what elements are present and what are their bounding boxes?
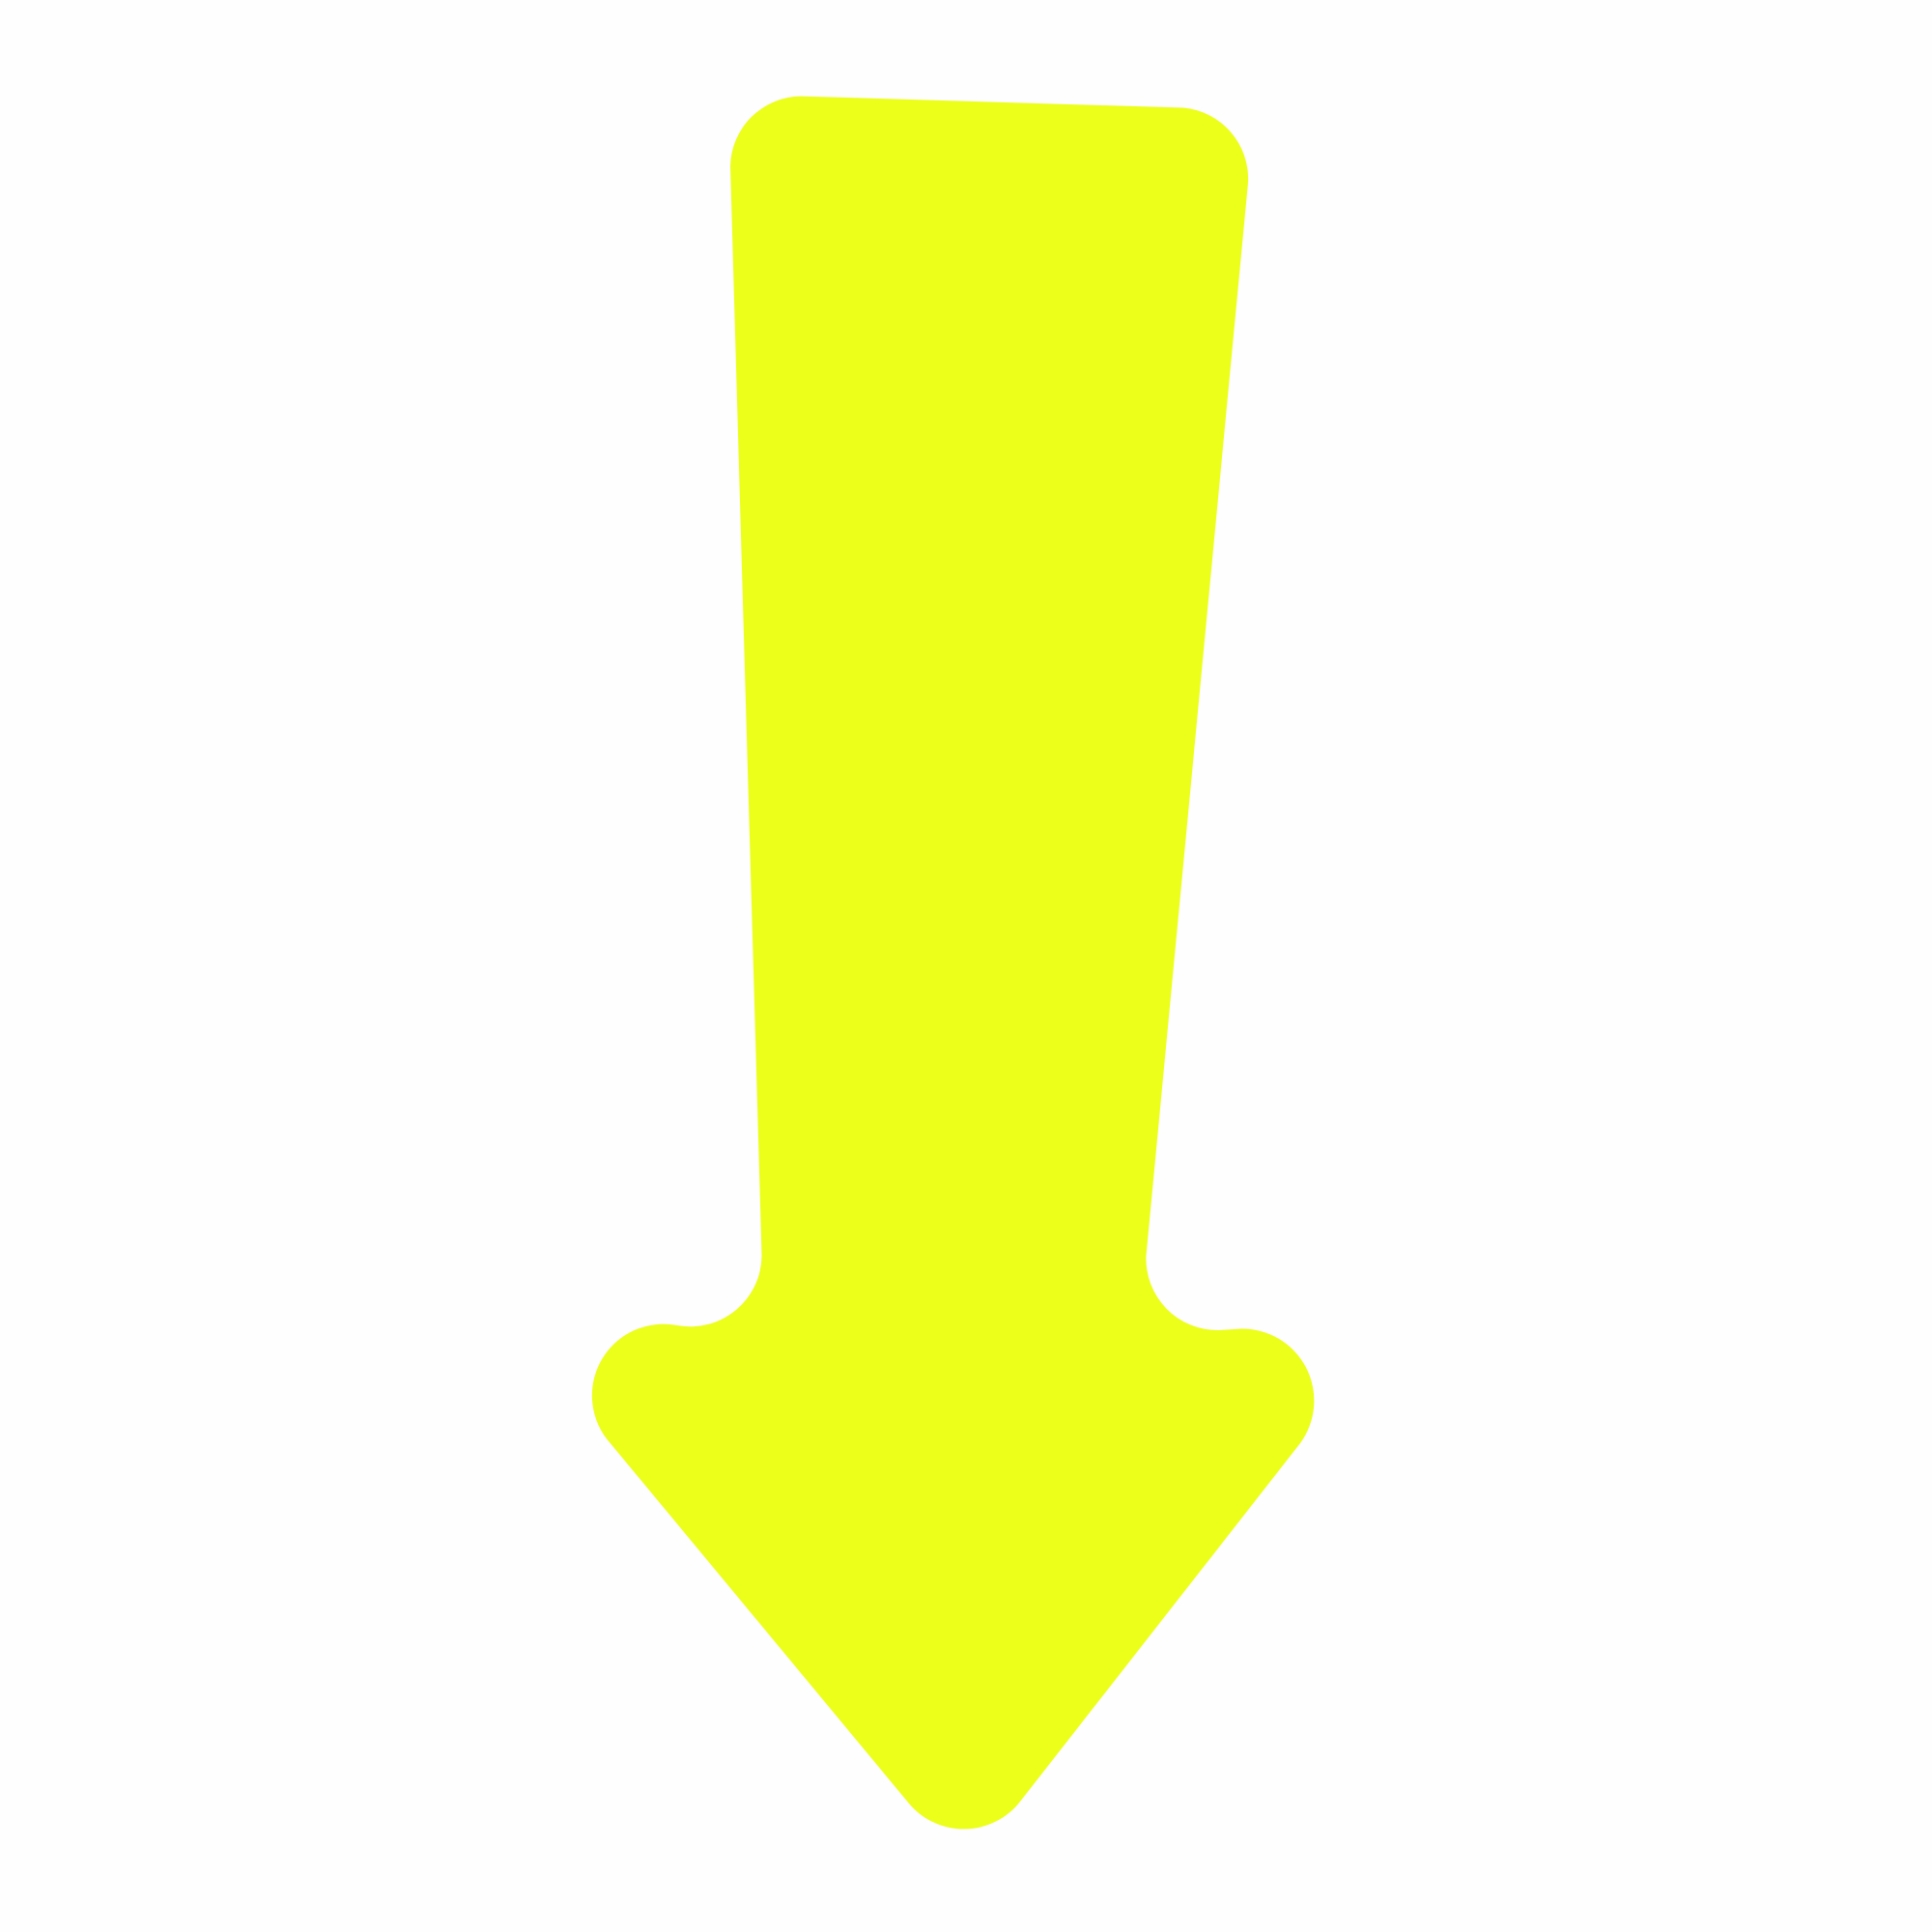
icon: yellow downward arrow <box>592 97 1314 1829</box>
